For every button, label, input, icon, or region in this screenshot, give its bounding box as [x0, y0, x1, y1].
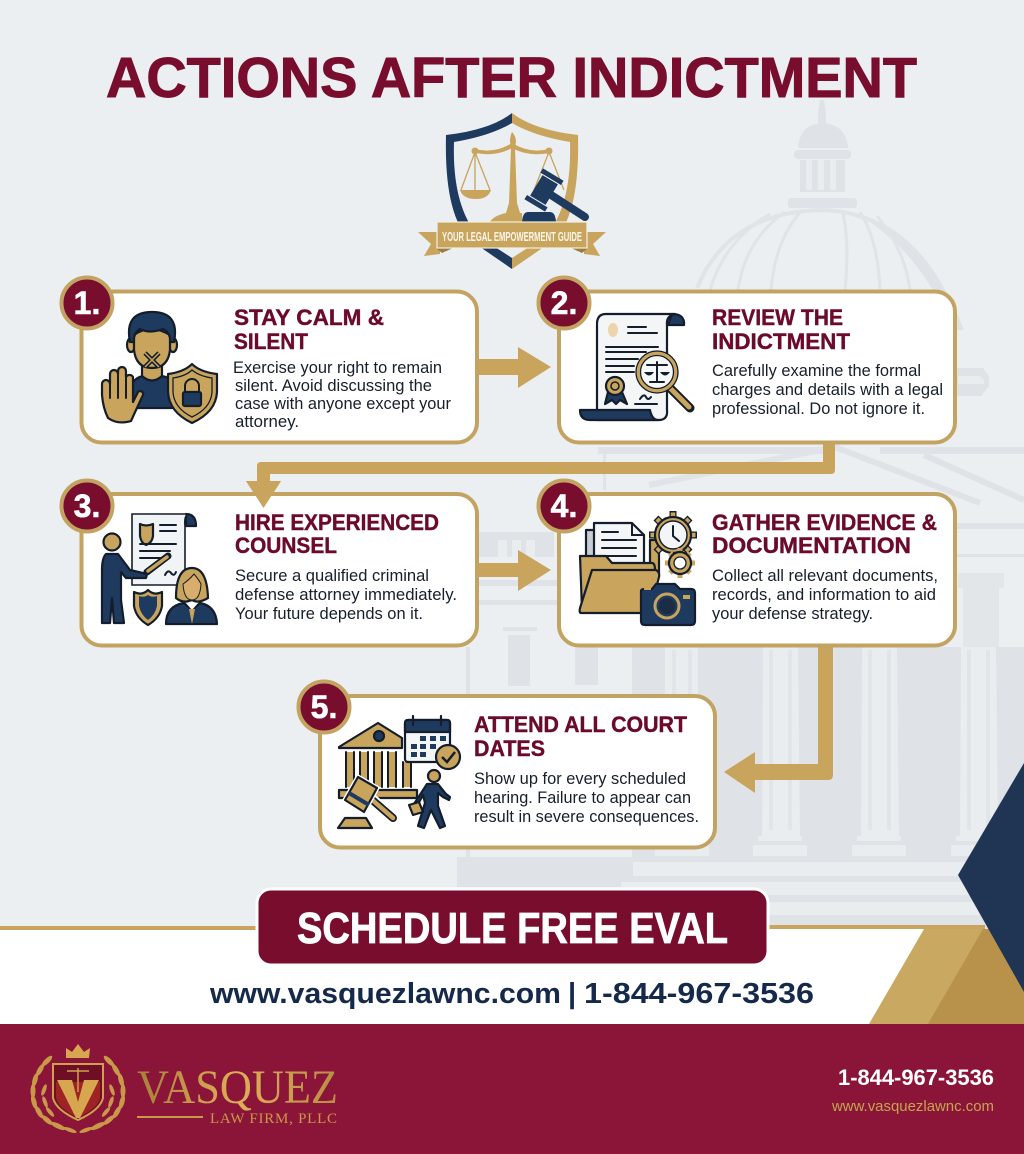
heading: STAY CALM &	[234, 305, 384, 330]
text block: Show up for every scheduled	[474, 769, 686, 788]
courthouse watermark	[457, 100, 1024, 930]
corner: gold and navy geometry	[869, 763, 1024, 1024]
badge: 2: 2.	[551, 285, 577, 321]
title: ACTIONS AFTER INDICTMENT	[106, 46, 917, 110]
column capital	[958, 573, 1004, 647]
heading	[235, 510, 439, 558]
panel: step 4	[559, 494, 955, 646]
heading: DOCUMENTATION	[712, 533, 911, 558]
text block: hearing. Failure to appear can	[474, 788, 691, 807]
text block	[712, 361, 943, 418]
badge: 2	[538, 278, 590, 328]
footer phone: 1-844-967-3536	[838, 1065, 994, 1090]
badge: 5	[298, 682, 350, 732]
heading: ATTEND ALL COURT	[474, 712, 688, 737]
heading	[712, 305, 851, 354]
icon: document and magnifier	[580, 314, 690, 420]
footer band	[0, 1024, 1024, 1154]
contact line: |	[568, 978, 576, 1010]
heading: SILENT	[234, 329, 309, 354]
text block: Your future depends on it.	[235, 604, 423, 623]
text block: defense attorney immediately.	[235, 585, 457, 604]
icon: attorney and client with document	[102, 514, 217, 625]
panel: step 1	[82, 292, 477, 442]
badge: 3: 3.	[74, 488, 100, 524]
arrow: step 1 to 2	[478, 347, 551, 388]
text block	[235, 566, 457, 623]
text block	[233, 358, 451, 431]
arrow: step 2 to 3	[246, 443, 835, 508]
icon: silent person with stop hand and lock shield	[102, 312, 217, 423]
heading	[474, 712, 688, 761]
emblem: shield with scales, gavel and ribbon	[418, 113, 606, 269]
arrow: step 3 to 4	[478, 550, 551, 591]
heading: HIRE EXPERIENCED	[235, 510, 439, 535]
panel: step 2	[559, 292, 955, 442]
badge: 4	[538, 480, 590, 532]
badge: 1	[62, 278, 112, 328]
text block: result in severe consequences.	[474, 807, 699, 826]
white lower band	[0, 929, 1024, 1024]
badge: 1: 1.	[74, 285, 100, 321]
text block: your defense strategy.	[712, 604, 873, 623]
text block: records, and information to aid	[712, 585, 936, 604]
icon: courthouse, calendar, gavel, walking person	[338, 716, 460, 828]
text block: professional. Do not ignore it.	[712, 399, 925, 418]
heading: COUNSEL	[235, 533, 337, 558]
badge: 4: 4.	[551, 488, 577, 524]
text block: Collect all relevant documents,	[712, 566, 938, 585]
contact line	[209, 978, 814, 1010]
CTA button: SCHEDULE FREE EVAL	[297, 904, 728, 953]
arrow: step 4 to 5	[724, 647, 833, 793]
heading	[712, 510, 937, 558]
badge: 5: 5.	[311, 689, 337, 725]
text block	[474, 769, 699, 826]
heading: REVIEW THE	[712, 305, 843, 330]
heading	[234, 305, 384, 354]
emblem: shield with scales, gavel and ribbon: YOUR LEGAL EMPOWERMENT GUIDE	[442, 229, 582, 244]
panel: step 5	[320, 696, 715, 848]
text block: Secure a qualified criminal	[235, 566, 429, 585]
icon: folder, gears and camera	[580, 511, 697, 625]
text block: Exercise your right to remain	[233, 358, 442, 377]
gold rule	[0, 925, 985, 930]
contact line: 1-844-967-3536	[584, 978, 814, 1010]
text block: silent. Avoid discussing the	[235, 376, 432, 395]
text block: Carefully examine the formal	[712, 361, 921, 380]
arrowhead overlay	[246, 481, 281, 508]
heading: GATHER EVIDENCE &	[712, 510, 937, 535]
panel: step 3	[82, 481, 477, 646]
text block: attorney.	[235, 412, 299, 431]
footer website: www.vasquezlawnc.com	[831, 1099, 994, 1115]
logo: Vasquez Law Firm: LAW FIRM, PLLC	[210, 1111, 337, 1127]
CTA button	[257, 889, 768, 965]
heading: DATES	[474, 736, 545, 761]
logo: Vasquez Law Firm	[30, 1044, 338, 1134]
text block	[712, 566, 938, 623]
text block: charges and details with a legal	[712, 380, 943, 399]
heading: INDICTMENT	[712, 329, 851, 354]
logo: Vasquez Law Firm: VASQUEZ	[137, 1061, 338, 1114]
contact line: www.vasquezlawnc.com	[209, 978, 561, 1010]
text block: case with anyone except your	[235, 394, 451, 413]
badge: 3	[62, 480, 112, 532]
